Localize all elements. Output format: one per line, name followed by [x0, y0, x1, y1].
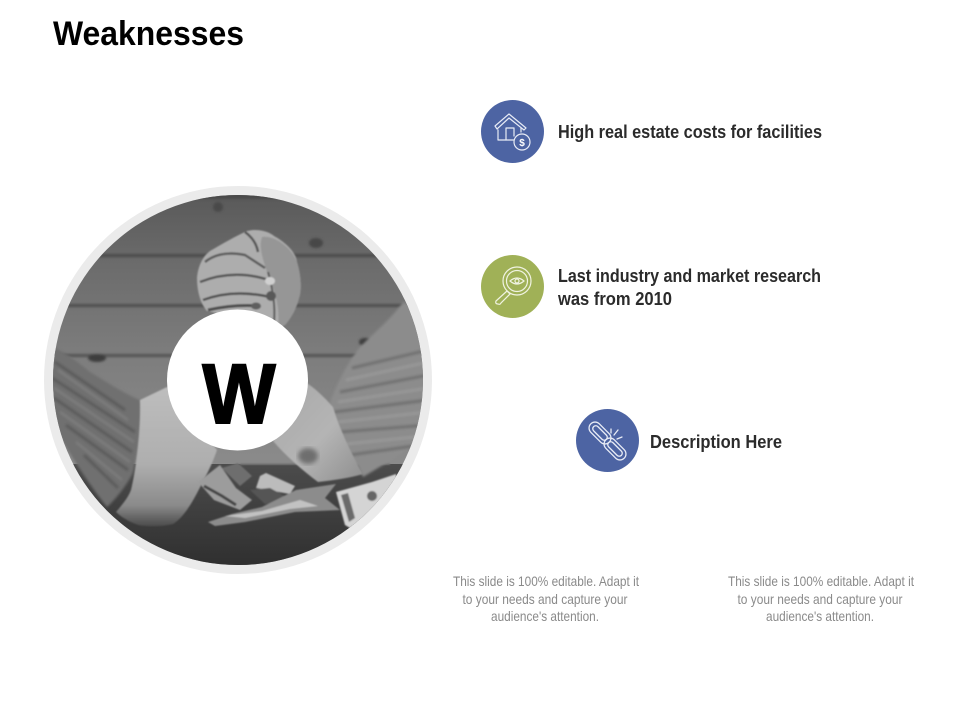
icon: broken chain [576, 409, 639, 472]
item 2 [481, 255, 821, 318]
text: market research: was from 2010 [557, 289, 672, 309]
table [73, 464, 403, 565]
money [198, 463, 398, 528]
left forearm [116, 387, 217, 526]
centre badge [167, 310, 308, 450]
photo: arm wrestling over money [50, 190, 430, 570]
text: description: Description Here [650, 432, 782, 452]
text block: left note: to your needs and capture your [462, 591, 628, 607]
right forearm [273, 382, 363, 482]
icon: house with dollar: $ [519, 138, 525, 149]
text block: left note: This slide is 100% editable. Adapt it [453, 573, 639, 589]
text block: right note [728, 573, 914, 624]
text: market research [557, 266, 821, 309]
text block: right note: to your needs and capture your [738, 591, 903, 607]
right sleeve [330, 302, 428, 477]
title: Weaknesses [53, 15, 244, 53]
text block: left note [453, 573, 639, 624]
item 1 [481, 100, 822, 163]
icon: house with dollar [481, 100, 544, 163]
text block: right note: This slide is 100% editable. Adapt it [728, 573, 914, 589]
clasped hands [197, 230, 301, 328]
text: real estate costs: High real estate costs for facilities [558, 122, 822, 142]
item 3 [576, 409, 782, 472]
panel: photo circle [44, 186, 432, 574]
text block: left note: audience's attention. [491, 608, 599, 624]
left sleeve [50, 346, 141, 507]
icon: magnifier with eye [481, 255, 544, 318]
photo ring [44, 186, 432, 574]
centre badge: W [202, 347, 276, 441]
text: market research: Last industry and market research [558, 266, 821, 286]
text block: right note: audience's attention. [766, 608, 874, 624]
